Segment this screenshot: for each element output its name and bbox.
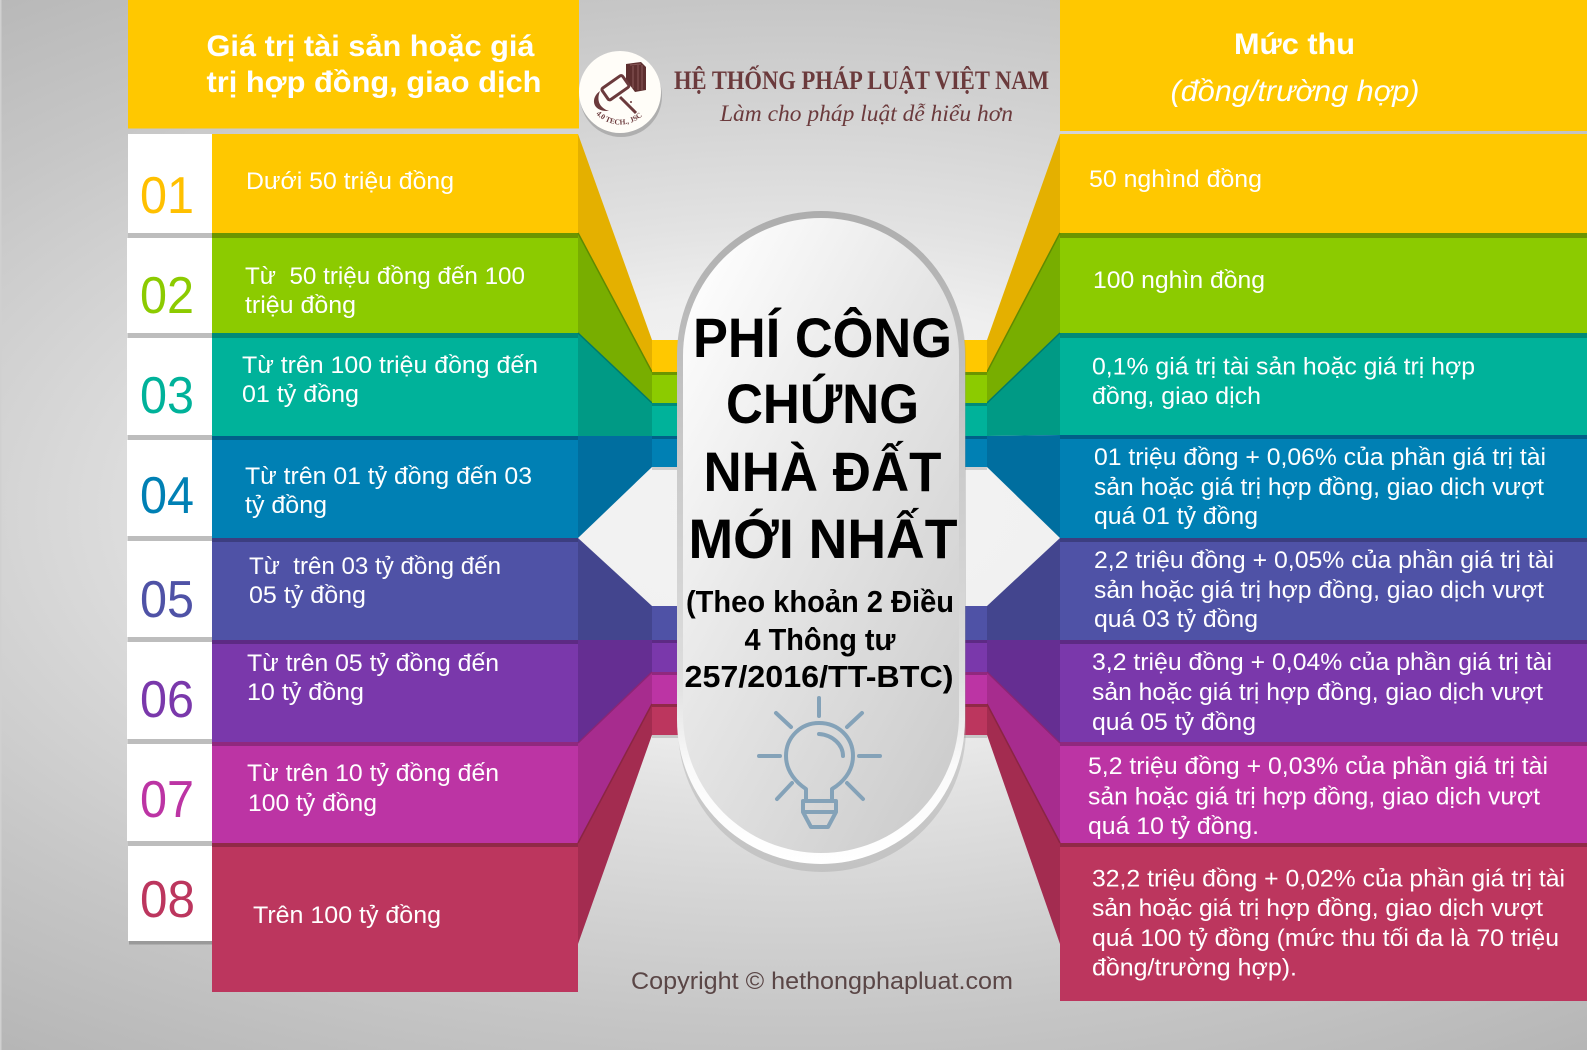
- row 06 fee: 3,2 triệu đồng + 0,04% của phần giá trị tài: [1092, 649, 1552, 676]
- row 02 number: 02: [140, 267, 194, 325]
- row 01 value range: Dưới 50 triệu đồng: [246, 168, 454, 195]
- row 04 value range: tỷ đồng: [245, 492, 327, 519]
- right header: Mức thu: [1234, 28, 1355, 61]
- main title: CHỨNG: [726, 372, 919, 435]
- left colour bands: [212, 134, 578, 992]
- row 04 fee: sản hoặc giá trị hợp đồng, giao dịch vượt: [1094, 474, 1544, 501]
- row 04 value range: Từ trên 01 tỷ đồng đến 03: [245, 463, 532, 490]
- row 07 fee: 5,2 triệu đồng + 0,03% của phần giá trị tài: [1088, 753, 1548, 780]
- row 08 value range: Trên 100 tỷ đồng: [253, 902, 441, 929]
- left header: Giá trị tài sản hoặc giá: [206, 30, 535, 63]
- row 06 fee: quá 05 tỷ đồng: [1092, 709, 1256, 736]
- legal basis subtitle: 257/2016/TT-BTC): [684, 660, 954, 694]
- row 04 fee: 01 triệu đồng + 0,06% của phần giá trị tài: [1094, 444, 1546, 471]
- row 08 fee: quá 100 tỷ đồng (mức thu tối đa là 70 triệu: [1092, 925, 1559, 952]
- row 06 fee: [1092, 649, 1552, 736]
- row 01 fee: 50 nghìnd đồng: [1089, 166, 1262, 193]
- row 07 fee: [1088, 753, 1548, 840]
- row 07 value range: Từ trên 10 tỷ đồng đến: [247, 760, 499, 787]
- legal basis subtitle: [684, 585, 954, 694]
- row 07 number: 07: [140, 771, 194, 829]
- row 03 value range: Từ trên 100 triệu đồng đến: [242, 352, 538, 379]
- row 05 value range: Từ trên 03 tỷ đồng đến: [249, 553, 501, 580]
- row 06 value range: [247, 650, 499, 706]
- row 08 fee: 32,2 triệu đồng + 0,02% của phần giá trị tài: [1092, 866, 1565, 892]
- row 06 value range: Từ trên 05 tỷ đồng đến: [247, 650, 499, 677]
- row 07 fee: sản hoặc giá trị hợp đồng, giao dịch vượt: [1088, 784, 1540, 810]
- row 04 number: 04: [140, 467, 194, 525]
- row 05 value range: [249, 553, 501, 609]
- row 04 fee: [1094, 444, 1546, 530]
- left header: trị hợp đồng, giao dịch: [206, 66, 542, 99]
- row 08 number: 08: [140, 871, 195, 929]
- row 03 fee: [1092, 354, 1475, 410]
- row 07 value range: 100 tỷ đồng: [248, 790, 377, 817]
- row 06 fee: sản hoặc giá trị hợp đồng, giao dịch vượt: [1092, 679, 1543, 706]
- right header: [1060, 0, 1587, 131]
- row 05 fee: [1094, 547, 1554, 633]
- row 08 fee: sản hoặc giá trị hợp đồng, giao dịch vượt: [1092, 895, 1543, 922]
- row 03 fee: 0,1% giá trị tài sản hoặc giá trị hợp: [1092, 354, 1475, 380]
- legal basis subtitle: 4 Thông tư: [744, 623, 896, 657]
- central capsule: [677, 211, 966, 872]
- row 05 fee: quá 03 tỷ đồng: [1094, 606, 1258, 633]
- row 02 value range: Từ 50 triệu đồng đến 100: [245, 263, 525, 290]
- number tiles: [127, 134, 213, 944]
- row 07 fee: quá 10 tỷ đồng.: [1088, 813, 1259, 840]
- main title: NHÀ ĐẤT: [704, 440, 942, 503]
- right header: (đồng/trường hợp): [1170, 75, 1420, 108]
- main title: [688, 306, 958, 570]
- main title: PHÍ CÔNG: [693, 306, 952, 369]
- right folds: [987, 134, 1060, 944]
- row 06 value range: 10 tỷ đồng: [247, 679, 364, 706]
- row 02 value range: triệu đồng: [245, 292, 356, 319]
- row 03 value range: [242, 352, 538, 408]
- left folds: [578, 134, 652, 944]
- row 05 number: 05: [140, 571, 194, 629]
- row 03 value range: 01 tỷ đồng: [242, 381, 359, 408]
- icon: light bulb: [759, 698, 880, 827]
- row 03 fee: đồng, giao dịch: [1092, 383, 1261, 410]
- row 03 number: 03: [140, 367, 194, 425]
- row 01 number: 01: [140, 167, 194, 225]
- row 02 value range: [245, 263, 525, 319]
- row 04 value range: [245, 463, 532, 519]
- row 08 fee: [1092, 866, 1565, 982]
- row 02 fee: 100 nghìn đồng: [1093, 267, 1265, 294]
- row 05 fee: 2,2 triệu đồng + 0,05% của phần giá trị tài: [1094, 547, 1554, 574]
- main title: MỚI NHẤT: [688, 507, 958, 570]
- row 08 fee: đồng/trường hợp).: [1092, 954, 1297, 982]
- row 06 number: 06: [140, 671, 194, 729]
- row 07 value range: [247, 760, 499, 817]
- centre ribbon segments: [652, 340, 987, 738]
- row 05 fee: sản hoặc giá trị hợp đồng, giao dịch vượt: [1094, 577, 1544, 604]
- tagline: Làm cho pháp luật dễ hiểu hơn: [719, 101, 1013, 127]
- logo: [579, 51, 662, 137]
- row 04 fee: quá 01 tỷ đồng: [1094, 503, 1258, 530]
- logo: 4.0 TECH., JSC: [596, 112, 642, 125]
- legal basis subtitle: (Theo khoản 2 Điều: [686, 585, 954, 619]
- row 05 value range: 05 tỷ đồng: [249, 582, 366, 609]
- site name: HỆ THỐNG PHÁP LUẬT VIỆT NAM: [674, 66, 1049, 95]
- right colour bands: [1060, 134, 1587, 1001]
- copyright: Copyright © hethongphapluat.com: [631, 968, 1013, 995]
- left header: [128, 0, 579, 128]
